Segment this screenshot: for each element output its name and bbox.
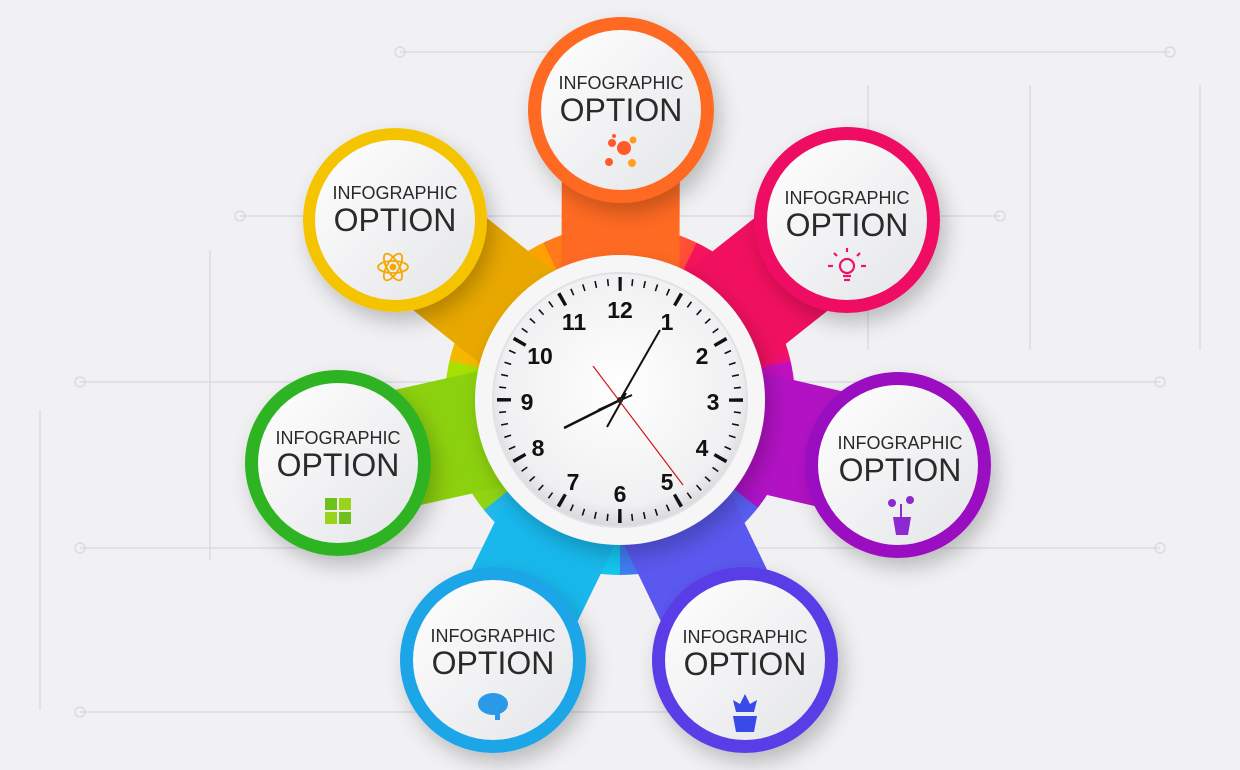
petal: bottom-left: OPTION — [432, 645, 554, 681]
petal: purple — [805, 372, 991, 558]
connectors — [338, 110, 898, 660]
icon: atom — [378, 251, 408, 283]
petal: pink: OPTION — [786, 207, 908, 243]
clock: 12 — [607, 297, 633, 323]
petal: top orange: INFOGRAPHIC — [558, 73, 684, 93]
petal: top orange: OPTION — [560, 92, 682, 128]
icon: lightbulb — [828, 248, 866, 280]
icon: puzzle — [325, 498, 351, 524]
clock: 7 — [567, 469, 579, 495]
colored ring behind clock — [445, 225, 795, 575]
petal: bottom-right: INFOGRAPHIC — [682, 627, 808, 647]
clock: 6 — [614, 481, 626, 507]
petal: pink — [754, 127, 940, 313]
clock: 2 — [696, 343, 708, 369]
petal: green: OPTION — [277, 447, 399, 483]
petal: pink: INFOGRAPHIC — [784, 188, 910, 208]
petal: green — [245, 370, 431, 556]
petal: bottom-left: INFOGRAPHIC — [430, 626, 556, 646]
clock: 4 — [696, 435, 709, 461]
clock: 10 — [527, 343, 553, 369]
petal: yellow — [303, 128, 487, 312]
clock: 1 — [661, 309, 674, 335]
icon: bubbles — [605, 134, 636, 167]
icon: brain — [478, 693, 508, 720]
clock: 3 — [707, 389, 719, 415]
icon: succulent — [733, 694, 757, 732]
petal: yellow: INFOGRAPHIC — [332, 183, 458, 203]
clock: 5 — [661, 469, 674, 495]
clock: 9 — [521, 389, 533, 415]
petal: yellow: OPTION — [334, 202, 456, 238]
petal: bottom-right: OPTION — [684, 646, 806, 682]
petal: top orange — [528, 17, 714, 203]
clock: 8 — [532, 435, 545, 461]
petal: bottom-right — [652, 567, 838, 753]
clock: 11 — [562, 309, 586, 335]
petal: bottom-left — [400, 567, 586, 753]
petal: purple: OPTION — [839, 452, 961, 488]
petal: green: INFOGRAPHIC — [275, 428, 401, 448]
clock — [475, 255, 765, 545]
petal: purple: INFOGRAPHIC — [837, 433, 963, 453]
icon: flower pot — [888, 496, 914, 535]
